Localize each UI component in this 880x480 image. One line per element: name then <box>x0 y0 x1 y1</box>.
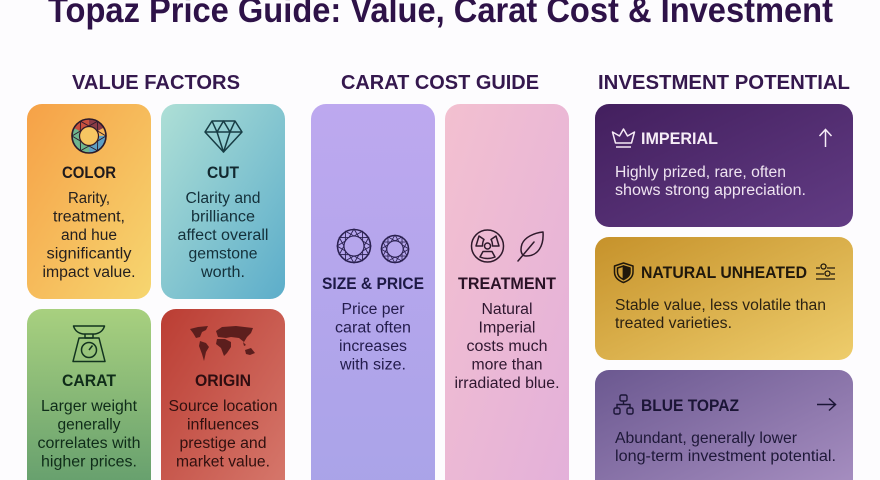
panel: size and price <box>311 104 435 480</box>
icon: diamond <box>205 121 242 152</box>
panel: cut <box>161 104 285 299</box>
text: blue topaz description: long-term investment potential. <box>615 448 836 465</box>
text: size description <box>335 301 411 374</box>
text: blue topaz description <box>615 430 836 465</box>
text: blue topaz description: Abundant, generally lower <box>615 430 797 447</box>
panel: natural unheated <box>595 237 853 360</box>
text: treatment description: irradiated blue. <box>454 375 560 392</box>
text: imperial description <box>615 164 806 199</box>
label: origin: ORIGIN <box>195 371 251 390</box>
label: imperial: IMPERIAL <box>641 129 718 148</box>
text: origin description: influences <box>187 416 259 434</box>
panel: origin <box>161 309 285 480</box>
panel: treatment <box>445 104 569 480</box>
text: cut description: brilliance <box>191 208 255 226</box>
text: cut description: worth. <box>200 264 245 281</box>
label: natural unheated: NATURAL UNHEATED <box>641 263 807 282</box>
icon: colored gem <box>72 119 106 153</box>
panel: imperial <box>595 104 853 227</box>
icon: arrow right <box>817 398 836 410</box>
text: treatment description: Imperial <box>478 320 536 336</box>
text: cut description: affect overall <box>178 227 268 244</box>
text: cut description: Clarity and <box>186 190 260 207</box>
text: color description: impact value. <box>42 264 136 281</box>
text: treatment description: costs much <box>466 338 548 355</box>
text: treatment description: Natural <box>482 301 532 318</box>
text: origin description: market value. <box>176 454 270 470</box>
icon: radiation <box>472 230 504 262</box>
icon: leaf <box>518 232 543 261</box>
text: origin description <box>168 398 278 470</box>
label: cut: CUT <box>207 163 240 182</box>
text: treatment description <box>454 301 560 392</box>
label: carat: CARAT <box>62 371 117 390</box>
text: color description: and hue <box>61 227 117 244</box>
text: carat description: Larger weight <box>41 398 138 415</box>
icon: two gems <box>337 229 409 263</box>
label: blue topaz: BLUE TOPAZ <box>641 396 739 415</box>
text: size description: increases <box>339 338 407 355</box>
text: cut description: gemstone <box>188 246 258 262</box>
heading: carat cost guide: CARAT COST GUIDE <box>341 72 539 94</box>
text: carat description: higher prices. <box>41 454 137 470</box>
text: size description: carat often <box>335 320 411 336</box>
text: carat description: generally <box>58 416 121 434</box>
label: size and price: SIZE & PRICE <box>322 274 424 293</box>
heading: value factors: VALUE FACTORS <box>72 72 240 94</box>
label: treatment: TREATMENT <box>458 274 557 293</box>
panel: blue topaz <box>595 370 853 480</box>
text: color description <box>42 190 136 281</box>
text: imperial description: shows strong appreciation. <box>615 182 806 199</box>
icon: shield <box>614 263 633 282</box>
text: size description: with size. <box>339 356 406 374</box>
icon: network <box>614 395 633 414</box>
label: color: COLOR <box>62 163 116 182</box>
text: origin description: Source location <box>168 398 278 415</box>
heading: investment potential: INVESTMENT POTENTIAL <box>598 72 850 94</box>
icon: crown <box>612 129 634 147</box>
icon: scale <box>73 326 105 362</box>
text: treatment description: more than <box>472 356 542 374</box>
text: size description: Price per <box>342 301 404 318</box>
text: natural description: Stable value, less volatile than <box>615 297 826 314</box>
icon: sliders <box>816 264 835 279</box>
icon: world map <box>190 326 255 361</box>
text: natural description <box>615 297 826 332</box>
text: carat description <box>38 398 140 470</box>
panel: carat <box>27 309 151 480</box>
text: carat description: correlates with <box>38 435 140 452</box>
text: origin description: prestige and <box>180 435 266 452</box>
text: color description: treatment, <box>53 208 125 226</box>
text: cut description <box>178 190 268 281</box>
icon: arrow up <box>820 130 832 147</box>
text: color description: Rarity, <box>68 190 110 207</box>
text: color description: significantly <box>46 246 132 262</box>
text: imperial description: Highly prized, rare, often <box>615 164 786 181</box>
text: natural description: treated varieties. <box>615 315 732 332</box>
panel: color <box>27 104 151 299</box>
